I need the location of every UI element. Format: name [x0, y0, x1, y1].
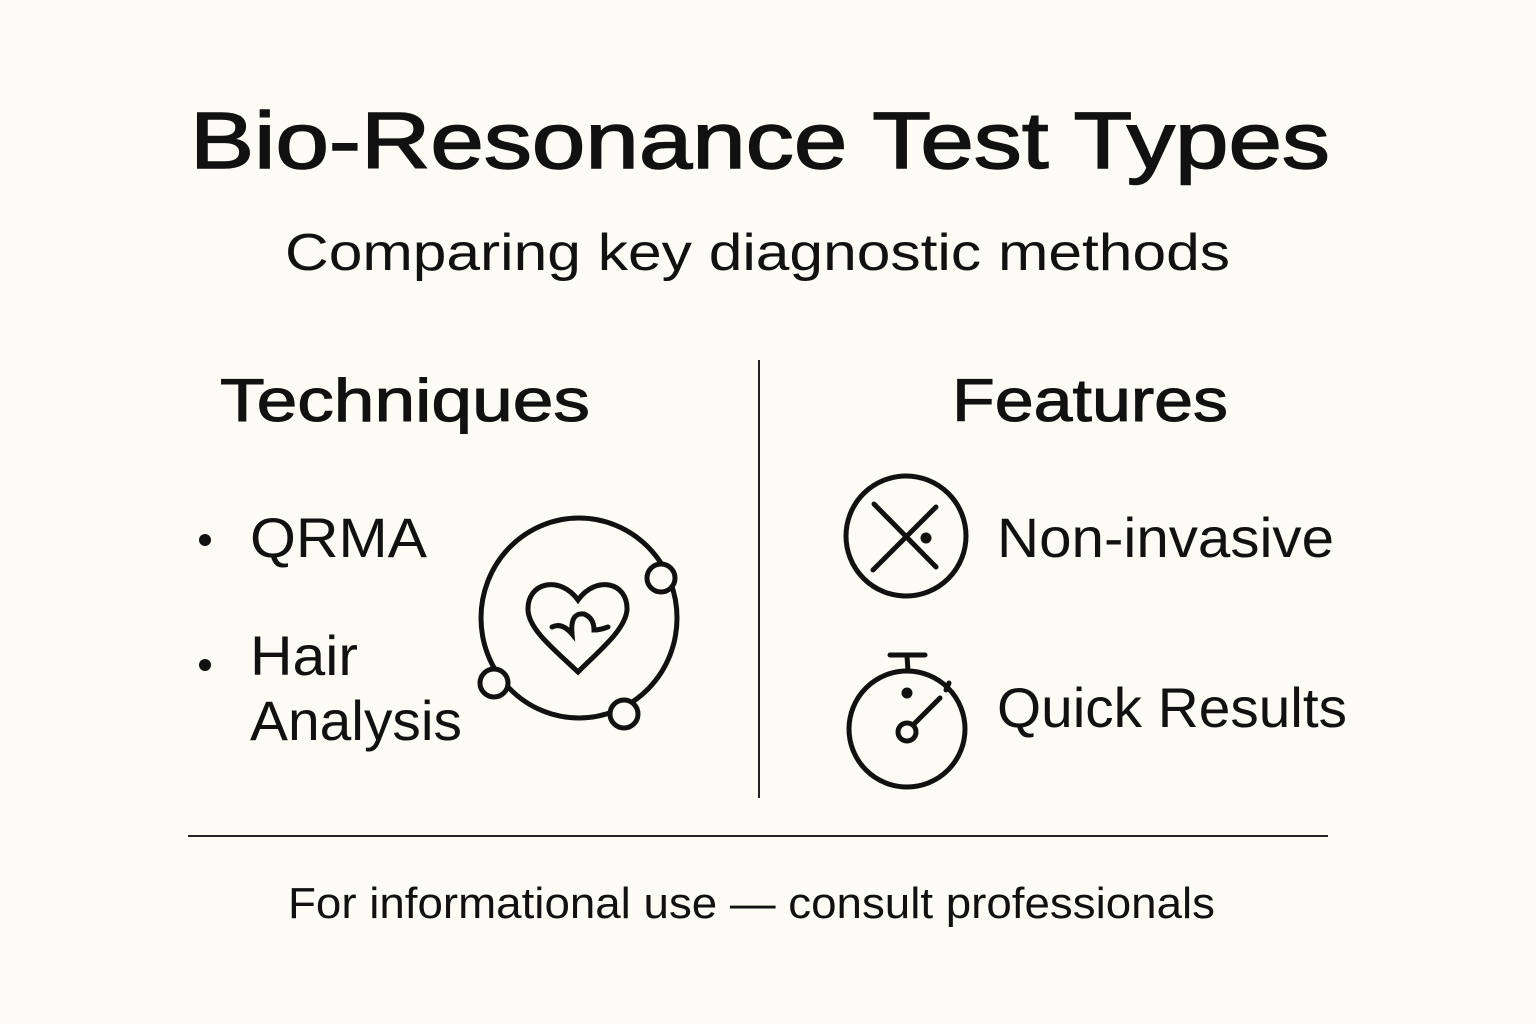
list: techniques	[199, 506, 462, 752]
icon: heart orbit	[480, 518, 677, 728]
heading: techniques: Techniques	[220, 367, 590, 434]
title: Bio-Resonance Test Types	[190, 96, 1330, 185]
icon: stopwatch	[849, 655, 965, 787]
footer: For informational use — consult professionals	[288, 879, 1215, 928]
heading: features: Features	[952, 367, 1228, 434]
list: techniques: QRMA	[250, 506, 428, 569]
text: non-invasive: Non-invasive	[997, 506, 1334, 569]
list: techniques: Hair	[250, 624, 358, 687]
subtitle: Comparing key diagnostic methods	[285, 224, 1230, 282]
text: quick results: Quick Results	[997, 676, 1347, 739]
icon: non-invasive	[846, 476, 966, 596]
list: techniques: Analysis	[250, 689, 462, 752]
